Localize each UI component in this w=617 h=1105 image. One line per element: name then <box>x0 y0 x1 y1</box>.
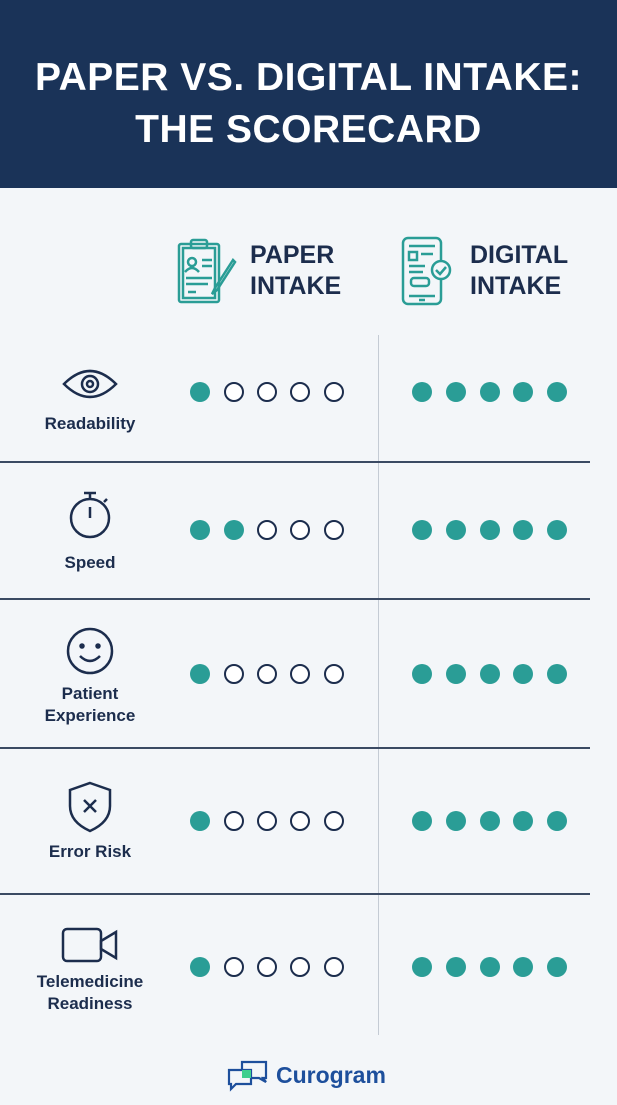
row: error risk: Error Risk <box>49 842 131 861</box>
row: readability: Readability <box>45 414 135 433</box>
column header: digital: INTAKE <box>470 272 561 300</box>
title: THE SCORECARD <box>135 108 482 151</box>
row: speed: Speed <box>64 553 116 572</box>
column header: paper: INTAKE <box>250 272 341 300</box>
row: readability <box>45 370 567 433</box>
column header: digital: DIGITAL <box>470 241 568 269</box>
icon: stopwatch <box>70 492 110 538</box>
header <box>0 0 617 188</box>
row: patient experience: Patient <box>62 684 118 703</box>
icon: shield <box>68 782 112 832</box>
row: speed <box>64 492 567 572</box>
column header: paper <box>178 238 341 304</box>
row: patient experience <box>45 628 567 725</box>
icon: chat bubbles <box>228 1060 268 1092</box>
column header: paper: PAPER <box>250 241 334 269</box>
row: telemedicine readiness: Readiness <box>47 994 133 1013</box>
icon: phone <box>402 236 452 306</box>
logo: Curogram: Curogram <box>276 1062 386 1088</box>
row: telemedicine readiness <box>36 928 567 1013</box>
icon: smile <box>66 628 114 674</box>
row: telemedicine readiness: Telemedicine <box>37 972 143 991</box>
icon: eye <box>62 370 118 398</box>
logo: Curogram <box>228 1060 386 1092</box>
title <box>35 56 582 151</box>
title: PAPER VS. DIGITAL INTAKE: <box>35 56 582 99</box>
row: patient experience: Experience <box>45 706 135 725</box>
icon: video camera <box>62 928 118 962</box>
icon: clipboard <box>178 238 237 304</box>
row: error risk <box>49 782 567 861</box>
column header: digital <box>402 236 568 306</box>
